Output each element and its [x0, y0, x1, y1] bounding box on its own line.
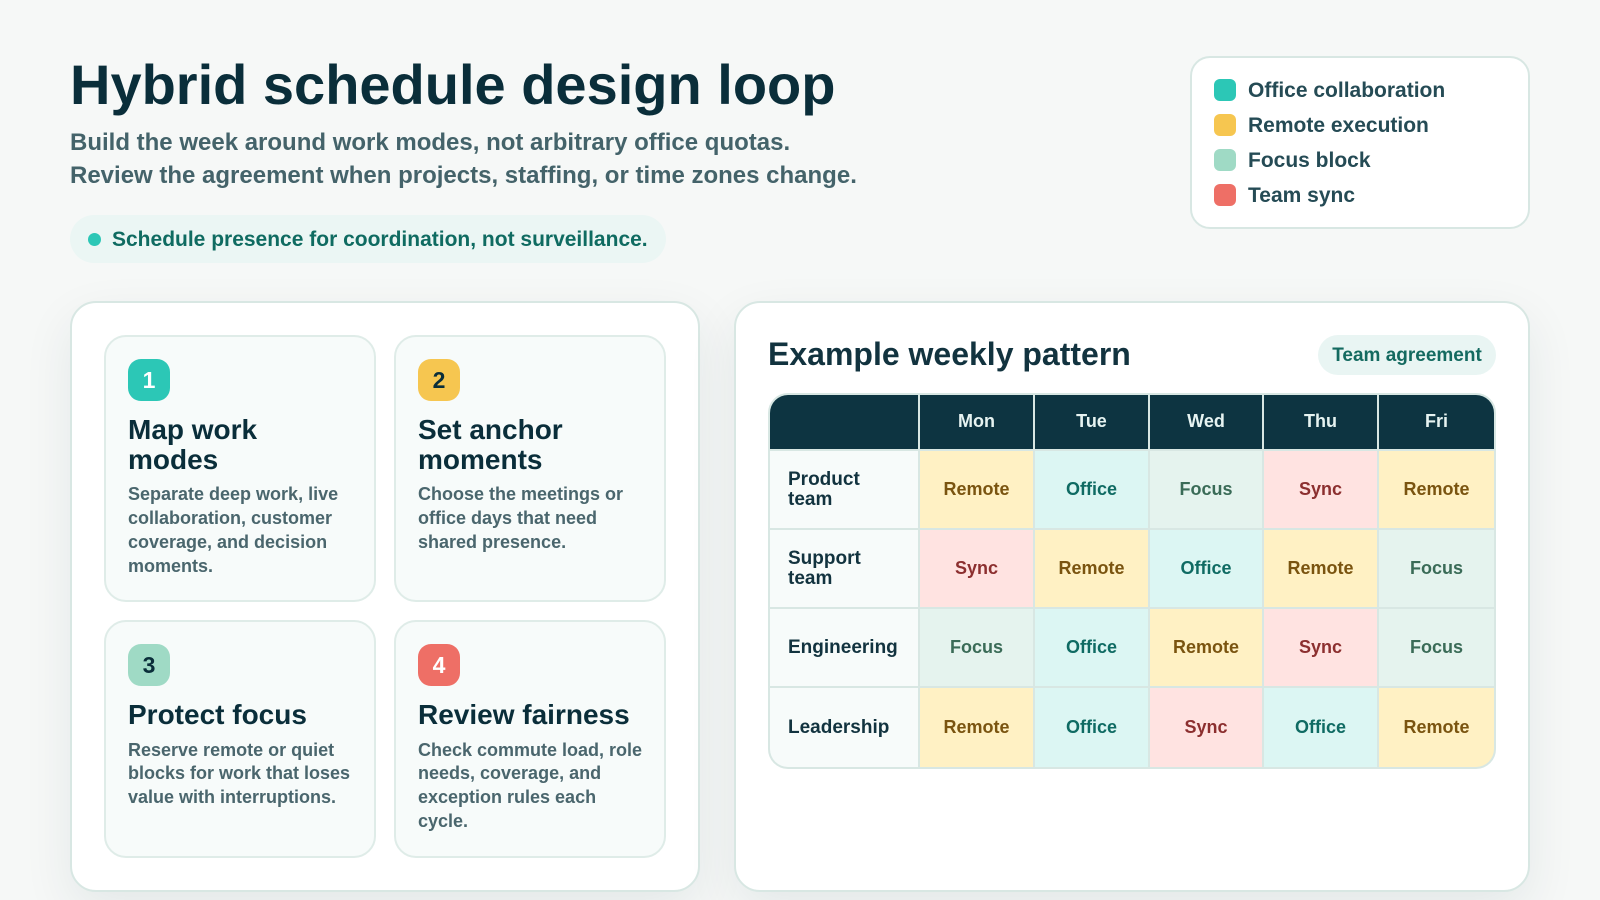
step text: Choose the meetings or office days that need shared presence.	[418, 484, 623, 552]
subtitle: Review the agreement when projects, staffing, or time zones change.	[70, 162, 857, 189]
legend item: office collaboration: Office collaboration	[1248, 79, 1445, 102]
subtitle	[70, 129, 857, 189]
schedule table: Focus	[1410, 637, 1463, 657]
step card 1	[104, 335, 376, 602]
schedule table: Remote	[943, 479, 1010, 499]
step heading: Review fairness	[418, 699, 630, 730]
step text: Check commute load, role needs, coverage, and exception rules each cycle.	[418, 740, 642, 831]
schedule table: Tue	[1076, 410, 1107, 430]
legend item: remote execution: Remote execution	[1248, 114, 1429, 137]
schedule table: team	[788, 488, 832, 510]
schedule table: Office	[1180, 558, 1232, 578]
schedule table: Remote	[1287, 558, 1354, 578]
badge 4	[418, 644, 460, 686]
schedule table	[768, 393, 1496, 769]
schedule table: Sync	[1184, 717, 1228, 737]
callout: principle pill	[70, 215, 666, 263]
schedule table: Remote	[1403, 479, 1470, 499]
schedule table: Thu	[1304, 410, 1337, 430]
schedule table: Mon	[958, 410, 995, 430]
schedule table: Product	[788, 468, 860, 490]
schedule table: Remote	[1058, 558, 1124, 578]
badge 3	[128, 644, 170, 686]
title: Hybrid schedule design loop	[70, 53, 835, 116]
schedule table: Remote	[943, 717, 1010, 737]
schedule table: Engineering	[788, 636, 898, 658]
schedule table: Focus	[950, 637, 1003, 657]
step text: Separate deep work, live collaboration, customer coverage, and decision moments.	[128, 484, 338, 576]
badge 1	[128, 359, 170, 401]
step heading: Map work modes	[128, 414, 257, 475]
badge 1: 1	[143, 367, 155, 393]
schedule table: Office	[1066, 637, 1117, 657]
schedule table: Sync	[1299, 479, 1342, 499]
legend	[1190, 56, 1530, 229]
panel: design loop steps	[70, 301, 700, 892]
step card 4	[394, 620, 666, 858]
schedule table: Remote	[1403, 717, 1470, 737]
badge 4: 4	[433, 652, 445, 678]
schedule table: Fri	[1425, 410, 1448, 430]
legend item: team sync: Team sync	[1248, 184, 1355, 207]
panel: example weekly pattern	[734, 301, 1530, 892]
schedule table: Remote	[1173, 637, 1239, 657]
callout: principle pill: Schedule presence for coordination, not surveillance.	[112, 228, 648, 251]
step card 2	[394, 335, 666, 602]
schedule table: Wed	[1187, 410, 1225, 430]
schedule table: Sync	[955, 558, 998, 578]
schedule table: Focus	[1179, 479, 1232, 499]
schedule table: Leadership	[788, 716, 889, 738]
schedule table: Focus	[1410, 558, 1463, 578]
badge 2: 2	[433, 367, 445, 393]
legend item: focus block: Focus block	[1248, 149, 1371, 172]
schedule table: Office	[1066, 479, 1117, 499]
schedule table: team	[788, 568, 832, 588]
step text: Reserve remote or quiet blocks for work that loses value with interruptions.	[128, 740, 350, 807]
schedule table: Office	[1066, 717, 1117, 737]
schedule table: Sync	[1299, 637, 1342, 657]
step heading: Set anchor moments	[418, 414, 563, 475]
tag: team agreement: Team agreement	[1332, 345, 1482, 366]
schedule table: Support	[788, 548, 861, 568]
step card 3	[104, 620, 376, 858]
tag: team agreement	[1318, 335, 1496, 375]
badge 3: 3	[143, 652, 155, 678]
subtitle: Build the week around work modes, not arbitrary office quotas.	[70, 129, 790, 156]
schedule table: Office	[1295, 717, 1346, 737]
badge 2	[418, 359, 460, 401]
step heading: Protect focus	[128, 699, 307, 730]
panel heading: Example weekly pattern	[768, 336, 1131, 372]
